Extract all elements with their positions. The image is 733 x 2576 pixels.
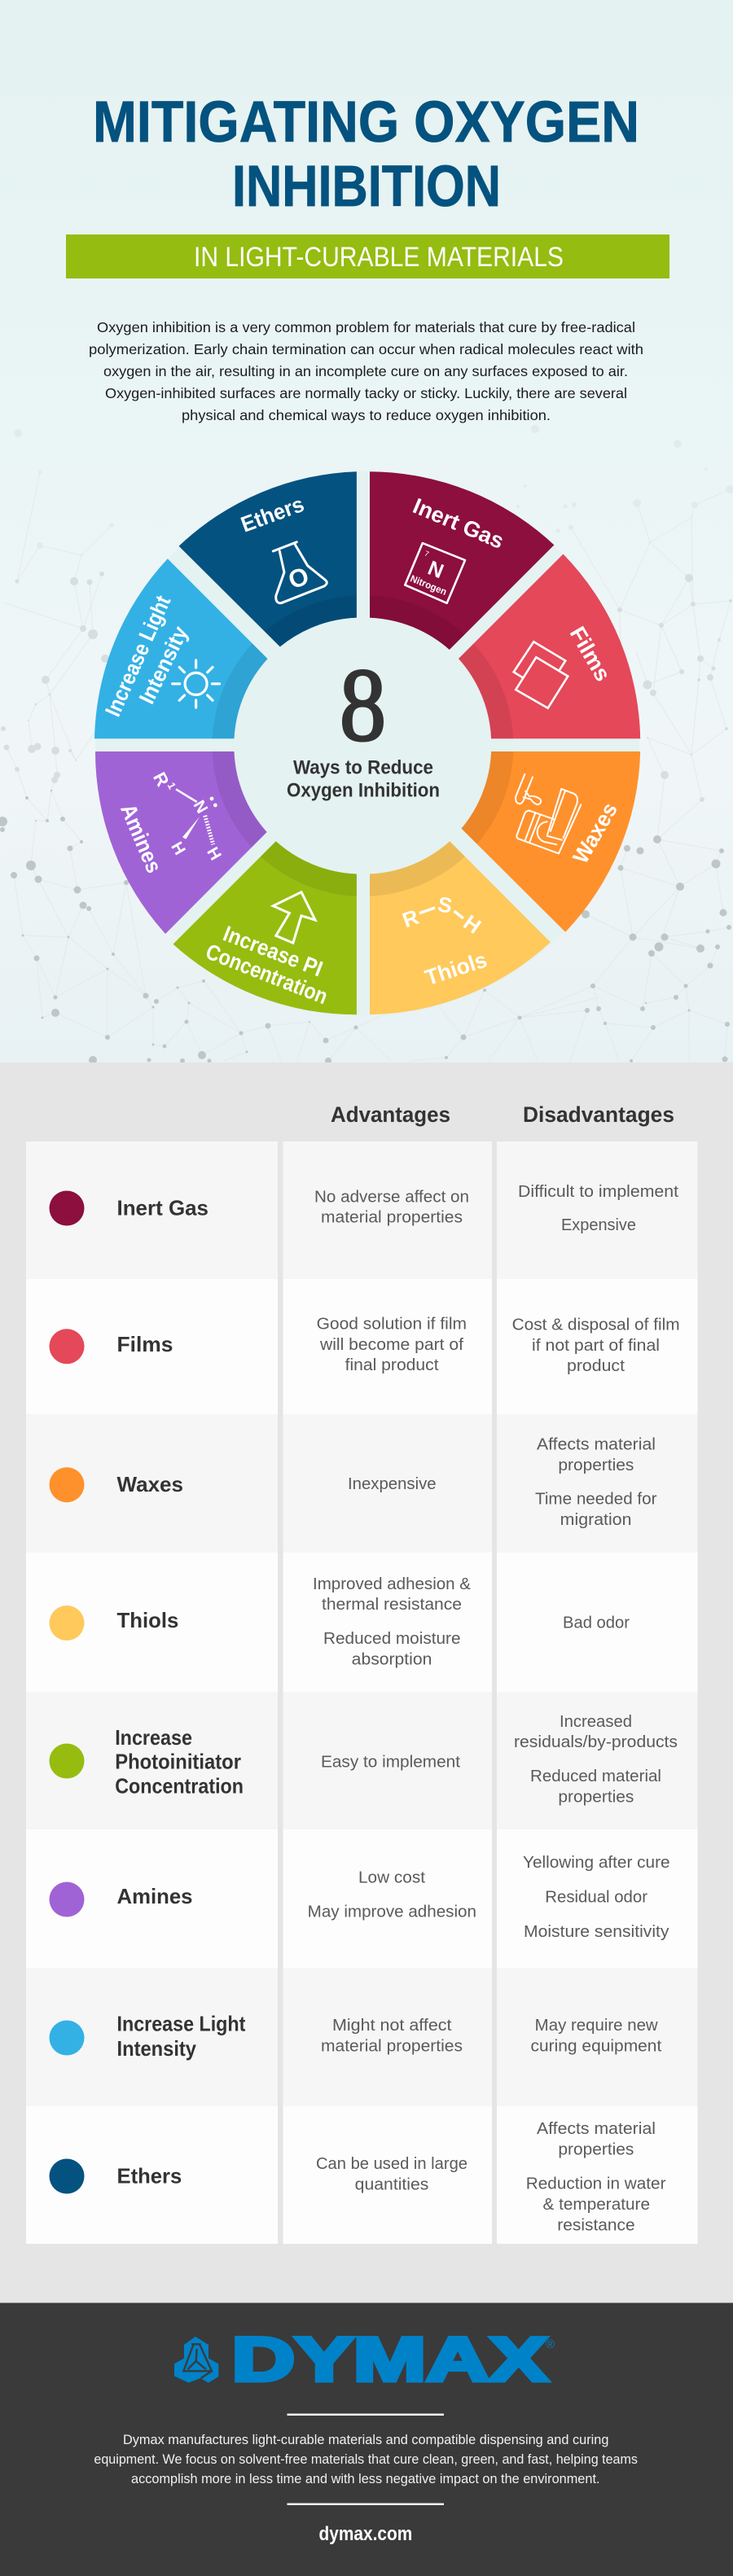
marker [49, 1467, 85, 1502]
icon: amine formula: H [167, 839, 189, 858]
company description: equipment. We focus on solvent-free materials that cure clean, green, and fast, helping teams [94, 2452, 638, 2467]
advantages: quantities [355, 2176, 428, 2194]
wedge: Inert Gas [370, 471, 554, 650]
icon: up arrow [273, 892, 315, 943]
inner shadow band [212, 595, 513, 896]
advantages: Improved adhesion & [313, 1575, 472, 1593]
icon: film sheets [514, 642, 568, 708]
wedge: Ethers [179, 471, 357, 646]
label: Inert Gas: Inert Gas [410, 493, 507, 554]
name: Inert Gas [117, 1196, 208, 1220]
row: Films [26, 1279, 697, 1414]
row: Increase Photoinitiator Concentration [26, 1692, 697, 1829]
centre caption: Ways to Reduce [293, 757, 433, 779]
disadvantages: Reduced material [530, 1768, 661, 1785]
intro paragraph: Oxygen inhibition is a very common problem for materials that cure by free-radical [97, 319, 635, 335]
logo icon [174, 2337, 218, 2383]
disadvantages: Yellowing after cure [523, 1854, 670, 1872]
advantages: Good solution if film [317, 1316, 467, 1334]
subtitle banner: IN LIGHT-CURABLE MATERIALS [194, 242, 564, 273]
advantages: final product [345, 1356, 439, 1374]
disadvantages: Affects material [537, 2120, 656, 2138]
disadvantages [518, 1183, 678, 1234]
label: Amines: Amines [116, 800, 166, 877]
disadvantages: residuals/by-products [514, 1733, 678, 1751]
name: Increase [115, 1725, 192, 1750]
advantages [313, 1575, 472, 1669]
advantages: Easy to implement [321, 1754, 460, 1772]
title [93, 90, 639, 219]
advantages: Might not affect [332, 2017, 452, 2035]
label: Increase Light Intensity: Intensity [134, 622, 193, 708]
icon: flask with O: O [284, 561, 313, 594]
wedge: Increase Light Intensity [94, 559, 268, 738]
disadvantages: Cost & disposal of film [512, 1316, 680, 1334]
icon: thiol formula: R [399, 905, 422, 932]
website link: dymax.com [319, 2523, 412, 2545]
row: Amines [26, 1829, 697, 1968]
advantages [308, 1869, 476, 1921]
intro paragraph: physical and chemical ways to reduce oxygen inhibition. [182, 407, 551, 423]
intro paragraph: Oxygen-inhibited surfaces are normally tacky or sticky. Luckily, there are several [105, 385, 627, 401]
icon: amine formula: 1 [165, 780, 178, 791]
column heading: Advantages: Advantages [331, 1102, 450, 1127]
company description [94, 2433, 638, 2486]
advantages: Can be used in large [316, 2155, 467, 2173]
name [115, 1725, 244, 1798]
disadvantages: migration [560, 1511, 632, 1529]
name: Increase Light [117, 2012, 246, 2036]
subtitle banner [66, 234, 669, 278]
disadvantages: product [567, 1357, 625, 1375]
disadvantages: Affects material [537, 1436, 656, 1454]
title: INHIBITION [232, 155, 501, 219]
icon: nitrogen periodic tile: N [424, 557, 447, 583]
advantages: thermal resistance [322, 1596, 462, 1614]
advantages: material properties [321, 2038, 463, 2056]
disadvantages: properties [558, 2141, 634, 2159]
name: Concentration [115, 1773, 244, 1798]
icon: thiol formula [399, 892, 485, 939]
disadvantages [535, 1436, 657, 1529]
marker [49, 2021, 85, 2055]
disadvantages: if not part of final [532, 1337, 660, 1355]
advantages: May improve adhesion [308, 1904, 476, 1921]
label: Waxes: Waxes [568, 799, 622, 868]
logo wordmark: DYMAX [231, 2325, 548, 2394]
icon: nitrogen periodic tile: Nitrogen [409, 572, 449, 598]
icon: nitrogen periodic tile: 7 [424, 550, 430, 559]
wedge: Amines [95, 751, 267, 934]
icon: amine formula: N [190, 797, 211, 817]
row: Thiols [26, 1553, 697, 1692]
label: Films: Films [565, 623, 616, 686]
marker [49, 2159, 85, 2193]
wheel: 8 ways to reduce oxygen inhibition [94, 471, 640, 1015]
wedge: Thiols [370, 841, 551, 1014]
wedge: Increase PI Concentration [173, 841, 357, 1014]
advantages: Reduced moisture [323, 1630, 461, 1648]
registered mark: ® [546, 2337, 555, 2351]
disadvantages: curing equipment [531, 2038, 662, 2056]
centre caption [287, 757, 440, 802]
name: Waxes [117, 1472, 183, 1496]
intro paragraph [89, 319, 643, 423]
name [117, 2012, 246, 2061]
icon: sun [173, 660, 220, 708]
disadvantages: resistance [557, 2216, 635, 2234]
row: Waxes [26, 1414, 697, 1553]
advantages [317, 1316, 467, 1374]
marker [49, 1190, 85, 1226]
centre disc [235, 617, 491, 874]
advantages: Inexpensive [348, 1475, 437, 1493]
icon: flask with O [273, 542, 327, 603]
background molecular network pattern [0, 425, 733, 1064]
icon: thiol formula: H [459, 909, 485, 939]
disadvantages: Expensive [561, 1216, 636, 1234]
marker [49, 1882, 85, 1917]
column heading: Disadvantages: Disadvantages [523, 1102, 674, 1127]
row: Increase Light Intensity [26, 1968, 697, 2106]
disadvantages: Reduction in water [526, 2175, 666, 2193]
icon: amine formula [149, 769, 225, 864]
title: MITIGATING OXYGEN [93, 90, 639, 155]
marker [49, 1744, 85, 1778]
advantages: material properties [321, 1208, 463, 1226]
disadvantages [531, 2017, 662, 2056]
divider [287, 2503, 444, 2505]
disadvantages: Moisture sensitivity [524, 1923, 669, 1941]
centre numeral 8: 8 [340, 647, 386, 763]
logo: Dymax [174, 2325, 555, 2394]
icon: nitrogen periodic tile [405, 543, 465, 603]
label: Increase PI Concentration [203, 921, 331, 1009]
disadvantages: Bad odor [563, 1614, 630, 1632]
name: Films [117, 1332, 173, 1356]
name: Thiols [117, 1608, 178, 1632]
disadvantages: properties [558, 1457, 634, 1474]
row: Inert Gas [26, 1141, 697, 1279]
advantages [314, 1189, 469, 1226]
name: Intensity [117, 2036, 196, 2061]
disadvantages: Residual odor [545, 1889, 647, 1907]
wedge: Waxes [461, 751, 640, 932]
disadvantages: May require new [535, 2017, 658, 2035]
disadvantages [512, 1316, 680, 1375]
marker [49, 1606, 85, 1641]
advantages: absorption [352, 1651, 432, 1669]
intro paragraph: polymerization. Early chain termination can occur when radical molecules react with [89, 341, 643, 357]
name: Ethers [117, 2164, 182, 2188]
advantages [316, 2155, 467, 2194]
icon: amine formula: R [149, 769, 173, 790]
disadvantages: & temperature [542, 2196, 650, 2214]
divider [287, 2413, 444, 2416]
icon: wax melter [516, 774, 581, 853]
label: Thiols: Thiols [422, 948, 490, 990]
disadvantages [514, 1713, 678, 1806]
intro paragraph: oxygen in the air, resulting in an incomplete cure on any surfaces exposed to air. [103, 363, 628, 379]
label: Increase PI Concentration: Increase PI [220, 921, 326, 981]
comparison table panel [0, 1062, 733, 2303]
disadvantages [523, 1854, 670, 1941]
icon: thiol formula: S [436, 892, 454, 918]
disadvantages: Increased [560, 1713, 632, 1731]
marker [49, 1329, 85, 1364]
header background panel [0, 0, 733, 1062]
disadvantages: Time needed for [535, 1490, 657, 1508]
company description: Dymax manufactures light-curable materials and compatible dispensing and curing [123, 2433, 608, 2447]
disadvantages: properties [558, 1788, 634, 1806]
wedge: Films [459, 554, 640, 738]
advantages [321, 2017, 463, 2056]
row: Ethers [26, 2106, 697, 2244]
label: Increase PI Concentration: Concentration [203, 940, 331, 1009]
icon: amine formula: H [203, 844, 225, 864]
advantages: will become part of [319, 1336, 463, 1354]
label: Ethers: Ethers [238, 492, 307, 537]
centre caption: Oxygen Inhibition [287, 780, 440, 802]
company description: accomplish more in less time and with less negative impact on the environment. [131, 2472, 599, 2486]
advantages: No adverse affect on [314, 1189, 469, 1207]
advantages: Low cost [358, 1869, 425, 1887]
footer panel [0, 2302, 733, 2576]
name: Amines [117, 1884, 192, 1908]
disadvantages [526, 2120, 666, 2234]
label: Increase Light Intensity: Increase Light [100, 592, 175, 720]
disadvantages: Difficult to implement [518, 1183, 678, 1201]
name: Photoinitiator [115, 1750, 241, 1774]
